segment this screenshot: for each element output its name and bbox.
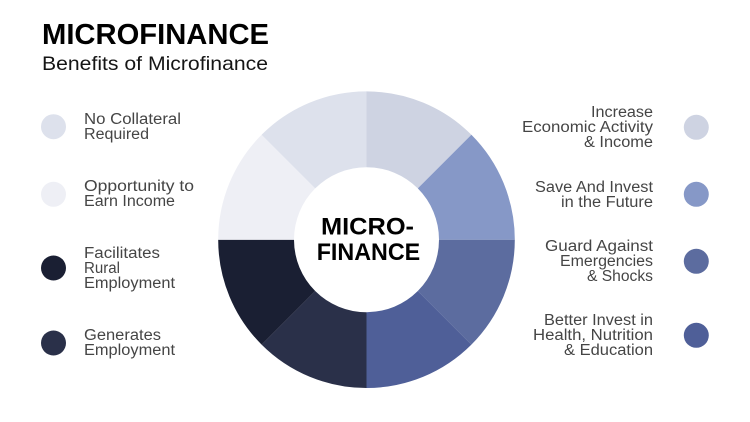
label: Rural [84, 260, 120, 277]
icon: dot [684, 115, 709, 140]
right item: better invest in health, nutrition and education [533, 312, 709, 359]
donut chart [218, 91, 515, 388]
segment: save and invest [418, 135, 515, 240]
icon: dot [41, 256, 66, 280]
left item: facilitates rural employment [41, 245, 176, 292]
right item: increase economic activity and income [522, 104, 709, 151]
label [84, 245, 176, 292]
label: Health, Nutrition [533, 327, 653, 344]
label: Better Invest in [544, 312, 653, 329]
icon: dot [684, 323, 709, 348]
label: Employment [84, 342, 176, 359]
left item: opportunity to earn income [41, 178, 194, 210]
icon: dot [41, 182, 66, 207]
donut centre label [317, 214, 420, 266]
label: No Collateral [84, 111, 181, 128]
segment: no collateral required [262, 91, 366, 188]
icon: dot [41, 114, 66, 139]
label [533, 312, 653, 359]
label: Increase [591, 104, 653, 121]
segment: facilitates rural employment [218, 240, 315, 345]
segment: better invest in health [366, 291, 471, 388]
segment: opportunity to earn income [218, 135, 315, 240]
label: Required [84, 126, 149, 143]
segment: generates employment [262, 291, 366, 388]
label: Guard Against [545, 238, 654, 255]
label: Facilitates [84, 245, 160, 262]
segment: guard against emergencies [418, 240, 515, 345]
left item: generates employment [41, 327, 176, 359]
label: Emergencies [560, 253, 653, 270]
title: MICROFINANCE [42, 19, 269, 51]
label: Save And Invest [535, 179, 654, 196]
donut centre label: FINANCE [317, 239, 420, 266]
label: Opportunity to [84, 178, 194, 195]
label: Earn Income [84, 193, 175, 210]
subtitle: Benefits of Microfinance [42, 53, 268, 75]
right item: guard against emergencies and shocks [545, 238, 709, 285]
label [535, 179, 654, 211]
label: & Income [584, 134, 653, 151]
label: Generates [84, 327, 161, 344]
label: in the Future [561, 194, 653, 211]
segment: increase economic activity [366, 91, 471, 188]
label [84, 178, 194, 210]
label [522, 104, 653, 151]
right item: save and invest in the future [535, 179, 709, 211]
label [84, 327, 176, 359]
label: & Shocks [587, 268, 653, 285]
icon: dot [684, 249, 709, 274]
label: & Education [564, 342, 653, 359]
label: Employment [84, 275, 176, 292]
icon: dot [684, 182, 709, 207]
donut centre label: MICRO- [321, 214, 414, 241]
label [545, 238, 654, 285]
icon: dot [41, 330, 66, 356]
label [84, 111, 181, 143]
label: Economic Activity [522, 119, 653, 136]
left item: no collateral required [41, 111, 181, 143]
